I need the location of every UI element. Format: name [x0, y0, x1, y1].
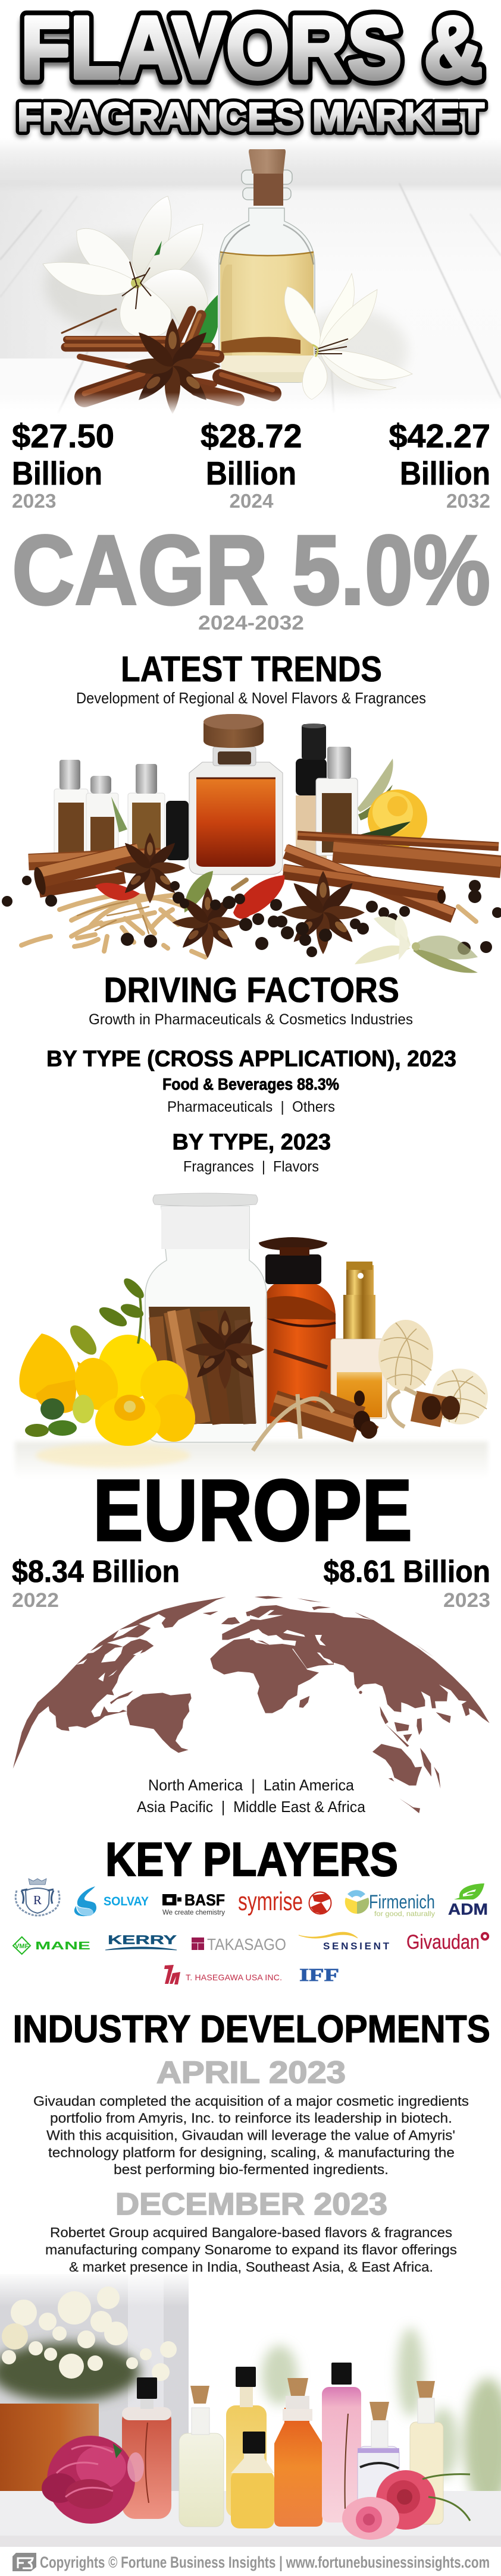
peppercorns — [2, 876, 501, 957]
stars — [114, 832, 186, 904]
right cinnamon — [283, 834, 501, 916]
stat: 2023 market size — [12, 417, 114, 512]
stat: Europe 2022: $8.34 Billion — [12, 1555, 180, 1589]
region headline: Europe: EUROPE — [93, 1462, 412, 1559]
yellow flowers — [19, 1333, 195, 1446]
cinnamon bundles — [253, 1388, 460, 1451]
logo: Sensient: SENSIENT — [323, 1940, 390, 1952]
stat: 2024 market size: 2024 — [230, 490, 274, 512]
flower left — [43, 196, 208, 337]
type segments: Fragrances | Flavors — [183, 1158, 319, 1175]
bottle: clear yellow — [410, 2381, 443, 2524]
stat: 2024 market size: $28.72 — [201, 417, 302, 455]
stat: 2023 market size: 2023 — [12, 490, 56, 512]
rose: large magenta — [42, 2436, 144, 2524]
left cinnamon — [29, 849, 161, 896]
other segments: Pharmaceuticals | Others — [167, 1099, 335, 1115]
table — [0, 2491, 501, 2547]
window background — [0, 2271, 501, 2509]
logo: Firmenich: Firmenich — [369, 1891, 435, 1913]
heading: by type: BY TYPE, 2023 — [173, 1130, 331, 1155]
text: December 2023 development: manufacturing company Sonarome to expand its flavor offerings — [45, 2242, 457, 2257]
leaf — [196, 295, 218, 351]
text: April 2023 development: technology platform for designing, scaling, & manufacturing the — [48, 2144, 455, 2160]
flower bouquet — [0, 2286, 177, 2402]
bottle: small yellow — [231, 2432, 274, 2528]
logo: Solvay: SOLVAY — [104, 1895, 149, 1908]
red peppers — [95, 875, 284, 919]
leading segment: food and beverages share: Food & Beverages 88.3% — [162, 1075, 339, 1093]
bottle: pink — [322, 2363, 361, 2522]
spray bottle — [331, 1262, 387, 1418]
logo: T. Hasegawa: T. HASEGAWA USA INC. — [186, 1973, 282, 1982]
big amber bottle — [189, 714, 283, 875]
footer logo — [12, 2553, 36, 2571]
flower right — [284, 273, 412, 400]
other regions list — [137, 1776, 366, 1816]
date: April 2023: APRIL 2023 — [156, 2056, 346, 2090]
black cap bottle — [296, 724, 327, 861]
cinnamon sticks hero — [62, 309, 274, 400]
white flower — [355, 914, 478, 973]
green leaf — [184, 871, 213, 913]
heading: driving factors: DRIVING FACTORS — [104, 971, 399, 1010]
logos: key players — [13, 1879, 488, 1985]
wicker balls — [378, 1320, 488, 1424]
title line 2: FRAGRANCES MARKET — [17, 95, 484, 140]
bottle: red — [122, 2377, 171, 2519]
logo: Givaudan: Givaudan — [406, 1931, 480, 1954]
logo: Mane — [13, 1937, 90, 1954]
stat: Europe 2023: 2023 — [443, 1589, 490, 1612]
text: December 2023 development: Robertet Group acquired Bangalore-based flavors & fragrances — [50, 2225, 452, 2240]
logo: Firmenich: for good, naturally — [374, 1910, 435, 1918]
heading: key players: KEY PLAYERS — [105, 1833, 398, 1886]
reflection — [15, 1442, 488, 1479]
stat: 2032 market size: Billion — [400, 455, 490, 492]
logo: BASF — [162, 1891, 225, 1917]
stat: Europe 2023 — [324, 1555, 490, 1612]
text: December 2023 development: & market presence in India, Southeast Asia, & East Africa. — [69, 2259, 433, 2275]
text: April 2023 development: portfolio from Amyris, Inc. to reinforce its leadership in biotech. — [50, 2111, 452, 2126]
logo: Firmenich — [345, 1890, 435, 1918]
logo: T. Hasegawa — [164, 1965, 282, 1984]
flower pot — [0, 2404, 99, 2491]
stat: 2024 market size — [201, 417, 302, 512]
logo: Kerry: KERRY — [108, 1933, 177, 1947]
logo: BASF: BASF — [184, 1891, 225, 1909]
bottle: tall yellow — [226, 2367, 267, 2517]
bottle: small purple — [358, 2402, 399, 2512]
star anise — [125, 319, 220, 414]
logo: Sensient — [299, 1932, 390, 1952]
text: December 2023 development — [45, 2225, 457, 2275]
stat: 2032 market size: 2032 — [446, 490, 490, 512]
logo: ADM — [448, 1883, 488, 1918]
glass jar — [145, 1193, 267, 1442]
title line 2: FRAGRANCES MARKET — [17, 97, 484, 143]
image: row of scented oil bottles with roses — [0, 2271, 501, 2547]
rose: front pink — [342, 2497, 399, 2540]
silver cap bottle — [316, 747, 358, 855]
stat: Europe 2023: $8.61 Billion — [324, 1555, 490, 1589]
other regions list: North America | Latin America — [148, 1776, 355, 1794]
green buds — [25, 1275, 147, 1437]
text: April 2023 development: Givaudan completed the acquisition of a major cosmetic ingredients — [33, 2093, 469, 2109]
amber bottle — [259, 1237, 336, 1424]
stat: Europe 2022 — [12, 1555, 180, 1612]
image: perfume bottles with spices — [2, 714, 501, 973]
logo: ADM: ADM — [448, 1901, 488, 1918]
date: December 2023: DECEMBER 2023 — [115, 2187, 387, 2222]
rose: right coral — [376, 2470, 470, 2530]
logo: BASF: We create chemistry — [162, 1908, 225, 1917]
stat: 2032 market size: $42.27 — [389, 417, 490, 455]
logo: Robertet crest: R — [33, 1893, 42, 1907]
heading: by type cross application: BY TYPE (CROSS APPLICATION), 2023 — [46, 1047, 456, 1072]
heading: latest trends: LATEST TRENDS — [121, 649, 382, 689]
bottle — [219, 149, 315, 382]
other regions list: Asia Pacific | Middle East & Africa — [137, 1798, 366, 1816]
logo: Takasago: TAKASAGO — [207, 1935, 286, 1954]
image: hero bottle with flowers and cinnamon on white planks — [0, 138, 501, 415]
world map — [13, 1596, 490, 1813]
left small bottles — [54, 760, 189, 860]
logo: Symrise: symrise — [238, 1887, 303, 1916]
stat: 2024 market size: Billion — [206, 455, 296, 492]
logo: IFF: IFF — [299, 1964, 339, 1985]
logo: Mane: MANE — [35, 1940, 90, 1952]
CAGR period: 2024-2032 — [198, 612, 304, 634]
logo: Mane: VMF — [15, 1943, 29, 1950]
stat: 2032 market size — [389, 417, 490, 512]
title: market name — [17, 0, 484, 143]
logo: Solvay — [74, 1886, 149, 1916]
text: driving factors detail: Growth in Pharmaceuticals & Cosmetics Industries — [89, 1011, 413, 1028]
logo: Robertet crest — [15, 1879, 60, 1916]
bottle: orange — [274, 2378, 322, 2527]
bottle: clear — [179, 2386, 224, 2527]
stat: 2023 market size: Billion — [12, 455, 102, 492]
logo: Kerry — [105, 1933, 177, 1950]
text: April 2023 development: With this acquisition, Givaudan will leverage the value of Amyris' — [46, 2127, 455, 2143]
ginger pile — [21, 880, 476, 957]
stat: 2023 market size: $27.50 — [12, 417, 114, 455]
title line 2: FRAGRANCES MARKET — [17, 95, 484, 140]
image: jar of cinnamon, amber bottle, spray and yellow flowers — [15, 1193, 488, 1479]
stat: Europe 2022: 2022 — [12, 1589, 59, 1612]
text: April 2023 development — [33, 2093, 469, 2177]
text: latest trends detail: Development of Regional & Novel Flavors & Fragrances — [76, 689, 426, 707]
text: April 2023 development: best performing bio-fermented ingredients. — [114, 2162, 389, 2177]
yellow rose and leaves — [357, 759, 427, 849]
